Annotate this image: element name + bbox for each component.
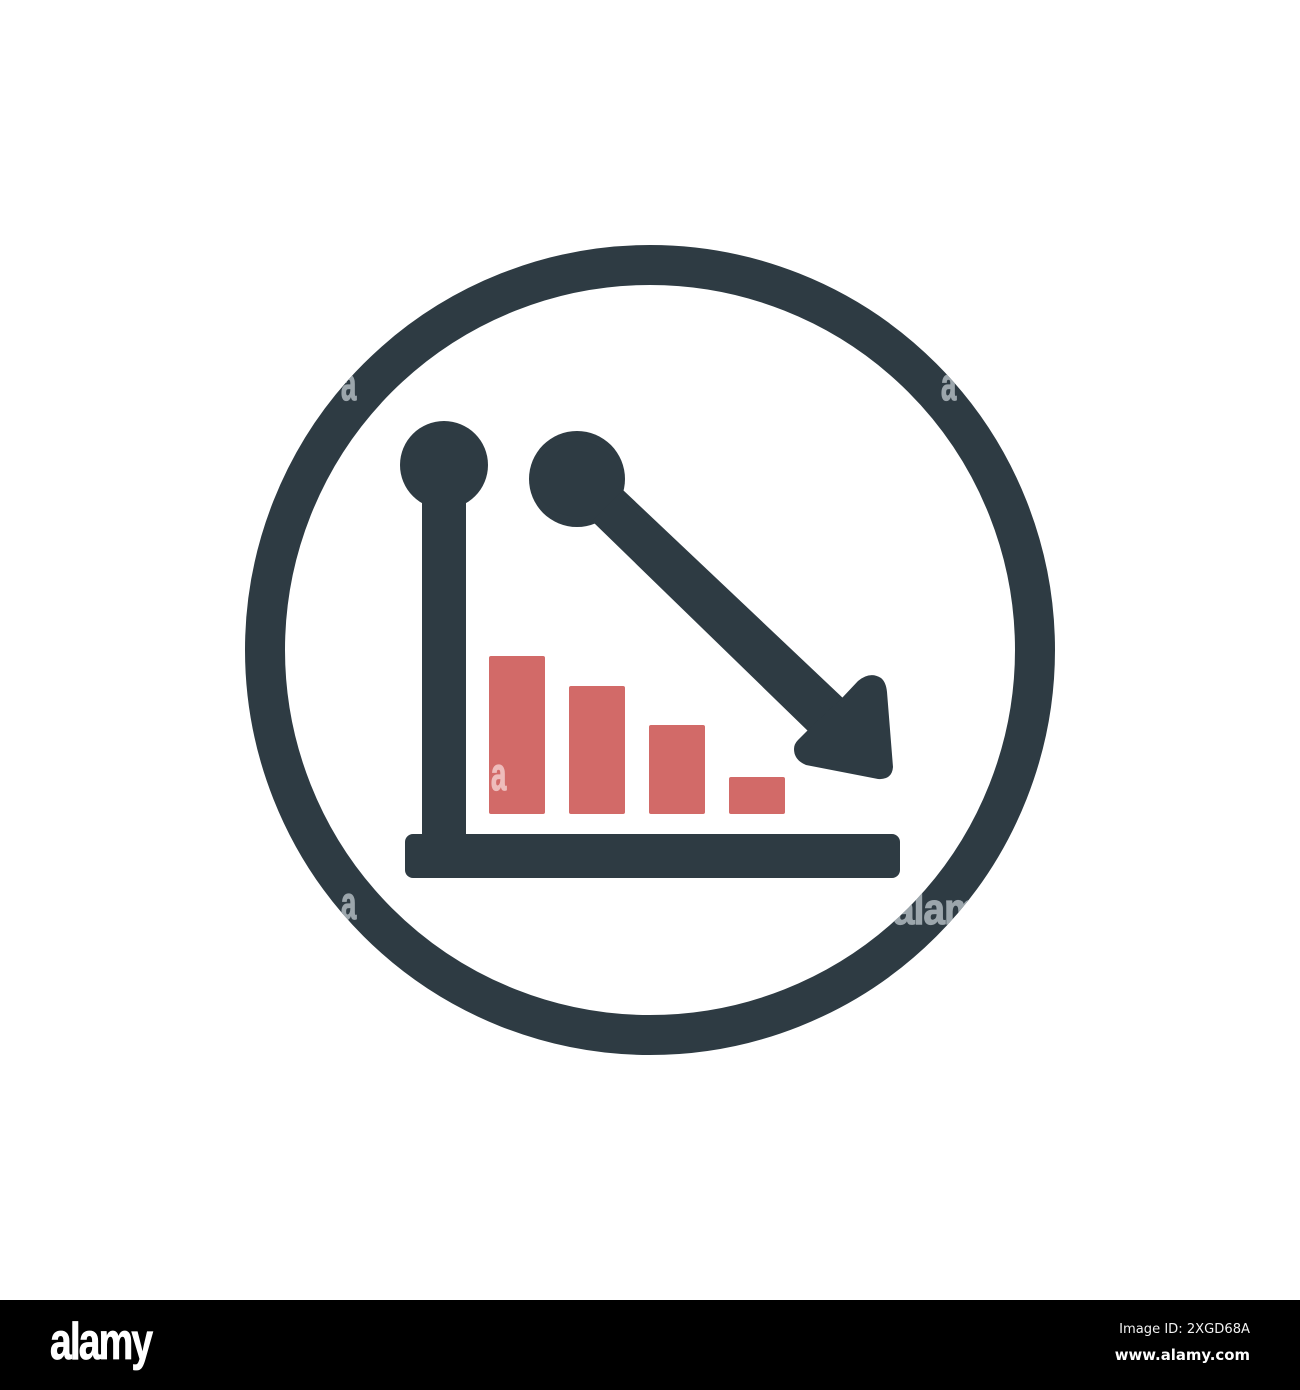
watermark on ring: alamy [893,884,999,934]
watermark on ring: a [341,879,357,930]
footer bar [0,1300,1300,1390]
watermark on ring: a [341,360,357,411]
icon: horizontal axis [405,834,900,878]
watermark on bar: a [491,750,507,801]
arrow: downward trend [529,431,893,779]
bar chart [489,656,785,814]
watermark on ring: a [941,360,957,411]
icon: vertical axis with ball [400,421,488,850]
icon: outer ring [265,265,1035,1035]
logo text: alamy [50,1313,151,1371]
url: www.alamy.com [1115,1346,1250,1364]
chart decline icon [245,245,1055,1055]
image id: Image ID: 2XGD68A [1119,1322,1250,1337]
watermark on ring [341,360,999,934]
